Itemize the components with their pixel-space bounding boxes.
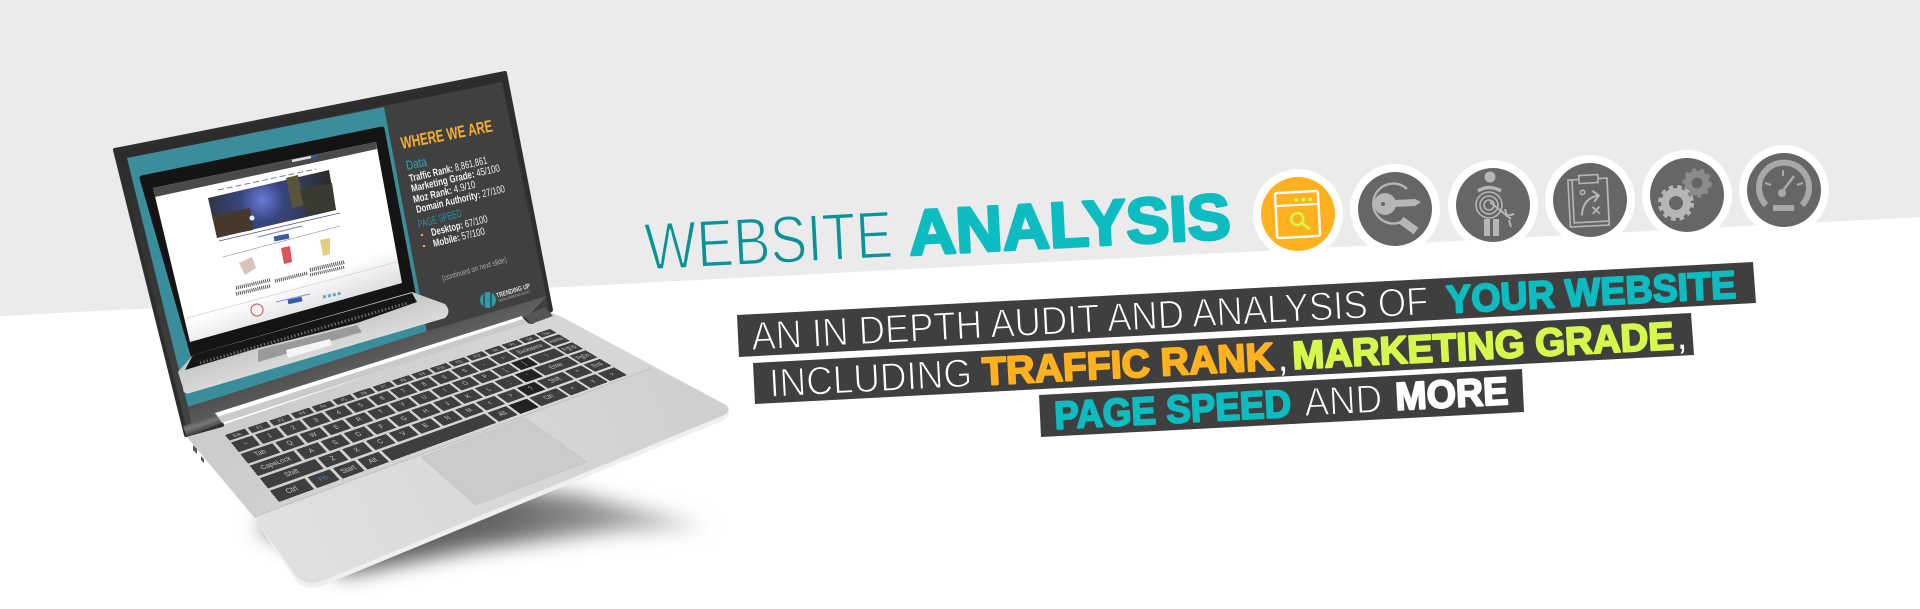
- keyboard: ]: [520, 361, 528, 366]
- description line 2: INCLUDING: [768, 351, 973, 406]
- mini laptop keyboard deck: [178, 292, 448, 393]
- slide data list: PAGE SPEED: [417, 208, 463, 231]
- Trending Up logo: TRENDING UP: [496, 283, 531, 300]
- keyboard: J: [443, 401, 452, 407]
- keyboard: 4: [334, 409, 343, 416]
- keyboard: U: [419, 394, 429, 401]
- inner laptop mockup on slide: [142, 129, 448, 393]
- keyboard: ?: [526, 386, 536, 392]
- keyboard: Fn: [316, 474, 330, 483]
- keyboard: Alt: [366, 456, 380, 465]
- title: Website Analysis: WEBSITE: [643, 197, 894, 285]
- keyboard: >: [607, 371, 617, 377]
- keyboard: 5: [356, 402, 365, 408]
- slide data list: [405, 154, 506, 250]
- keyboard: Ins: [490, 348, 500, 352]
- keyboard: ;: [505, 380, 513, 385]
- keyboard: F7: [379, 384, 388, 389]
- keyboard: 9: [440, 374, 449, 380]
- keyboard: v: [588, 378, 598, 384]
- keyboard: F9: [418, 371, 427, 376]
- keyboard: 2: [289, 424, 297, 431]
- keyboard: O: [460, 380, 471, 387]
- icon: clipboard strategy: [1545, 155, 1635, 245]
- title: Website Analysis: ANALYSIS: [907, 180, 1232, 269]
- keyboard: X: [352, 447, 362, 454]
- keyboard: 3: [312, 417, 320, 423]
- keyboard: [: [501, 368, 509, 373]
- slide data list: Mobile: 57/100: [432, 225, 486, 250]
- keyboard: T: [377, 409, 386, 415]
- keyboard: 7: [399, 388, 408, 394]
- keyboard: ~: [241, 440, 250, 447]
- keyboard: S: [330, 439, 340, 446]
- description line 3: AND: [1303, 377, 1383, 425]
- icon: key and magnifier: [1350, 164, 1440, 254]
- keyboard: F8: [399, 378, 408, 383]
- keyboard: F11: [454, 359, 465, 364]
- keyboard: \: [543, 353, 551, 358]
- keyboard: L: [484, 386, 494, 392]
- description line 3: MORE: [1394, 370, 1509, 419]
- slide data list: Desktop: 67/100: [430, 213, 489, 239]
- keyboard: Q: [285, 439, 295, 447]
- keyboard: Home: [547, 336, 566, 344]
- keyboard: Pau: [541, 331, 552, 336]
- description line 2: TRAFFIC RANK: [981, 336, 1275, 394]
- slide data list: Moz Rank: 4.9/10: [412, 179, 477, 206]
- keyboard: F4: [319, 404, 328, 409]
- slide note: (continued on next slide): [441, 255, 508, 283]
- keyboard: F6: [359, 390, 368, 396]
- keyboard: Enter: [547, 362, 566, 370]
- Trending Up logo: DIGITAL MARKETING AGENCY: [498, 289, 531, 303]
- slide data list: Traffic Rank: 8,861,861: [408, 155, 489, 185]
- keyboard: F: [377, 423, 386, 430]
- description line 3: [1039, 369, 1524, 438]
- keyboard: Del: [524, 336, 534, 341]
- slide data list: Data: [405, 154, 429, 173]
- keyboard: N: [442, 415, 453, 421]
- description line 1: AN IN DEPTH AUDIT AND ANALYSIS OF: [750, 280, 1430, 359]
- description line 3: PAGE SPEED: [1053, 383, 1292, 438]
- keyboard: F3: [298, 410, 307, 416]
- keyboard: =: [498, 355, 508, 360]
- keyboard: End: [589, 361, 606, 369]
- description line 2: ,: [1675, 315, 1688, 358]
- keyboard: Backspace: [515, 343, 545, 355]
- icon: browser search (highlighted): [1253, 169, 1343, 259]
- description line 2: ,: [1276, 337, 1289, 380]
- keyboard: 6: [378, 395, 387, 401]
- keyboard: E: [332, 424, 341, 431]
- keyboard: >: [506, 393, 516, 399]
- description line 2: MARKETING GRADE: [1291, 315, 1675, 378]
- keyboard: 0: [460, 368, 469, 373]
- keyboard: PgDn: [574, 352, 593, 361]
- keyboard: Y: [398, 401, 408, 408]
- icon: speedometer: [1739, 145, 1829, 235]
- keyboard: Shift: [283, 468, 301, 479]
- keyboard: [225, 329, 626, 502]
- title: Website Analysis: [643, 180, 1232, 285]
- slide data list: Marketing Grade: 45/100: [410, 162, 501, 195]
- keyboard: R: [354, 416, 364, 423]
- description line 1: YOUR WEBSITE: [1445, 264, 1737, 322]
- description line 2: [753, 313, 1694, 406]
- keyboard: H: [421, 408, 431, 414]
- keyboard: V: [398, 430, 409, 437]
- keyboard: M: [464, 407, 475, 414]
- keyboard: Prt: [508, 342, 517, 347]
- keyboard: F2: [277, 417, 285, 423]
- slide heading: WHERE WE ARE: WHERE WE ARE: [399, 117, 494, 153]
- keyboard: <: [568, 385, 578, 391]
- keyboard: Esc: [231, 431, 243, 438]
- keyboard: -: [480, 362, 488, 367]
- keyboard: ^: [574, 369, 583, 374]
- keyboard: F5: [339, 397, 348, 402]
- keyboard: Shift: [546, 376, 564, 384]
- keyboard: Alt: [496, 410, 509, 418]
- keyboard: B: [421, 422, 431, 429]
- site text lines and buttons: [218, 156, 345, 302]
- keyboard: A: [306, 447, 316, 454]
- keyboard: C: [375, 438, 386, 446]
- keyboard: P: [481, 374, 491, 380]
- keyboard: K: [463, 393, 473, 400]
- description line 1: [737, 262, 1756, 359]
- hero photo of welder: [208, 170, 336, 238]
- keyboard: Ctrl: [541, 393, 557, 401]
- keyboard: 8: [420, 381, 429, 387]
- keyboard: CapsLock: [259, 455, 293, 471]
- keyboard: I: [441, 388, 449, 393]
- Trending Up logo: [480, 283, 531, 308]
- keyboard: F1: [255, 424, 264, 430]
- slide data list: Domain Authority: 27/100: [415, 183, 506, 216]
- icon: gears: [1642, 150, 1732, 240]
- keyboard: Start: [338, 464, 358, 475]
- keyboard: Z: [328, 455, 338, 462]
- keyboard: <: [485, 400, 495, 406]
- keyboard: G: [399, 415, 409, 422]
- keyboard: ': [525, 373, 533, 378]
- icon: target person with arrow: [1448, 160, 1538, 250]
- keyboard: Ctrl: [284, 485, 300, 495]
- keyboard: F12: [472, 353, 483, 359]
- keyboard: 1: [265, 432, 274, 439]
- keyboard: W: [308, 431, 319, 439]
- keyboard: Tab: [253, 448, 268, 458]
- keyboard: F10: [435, 365, 446, 371]
- keyboard: D: [353, 431, 364, 438]
- keyboard: PgUp: [560, 344, 579, 352]
